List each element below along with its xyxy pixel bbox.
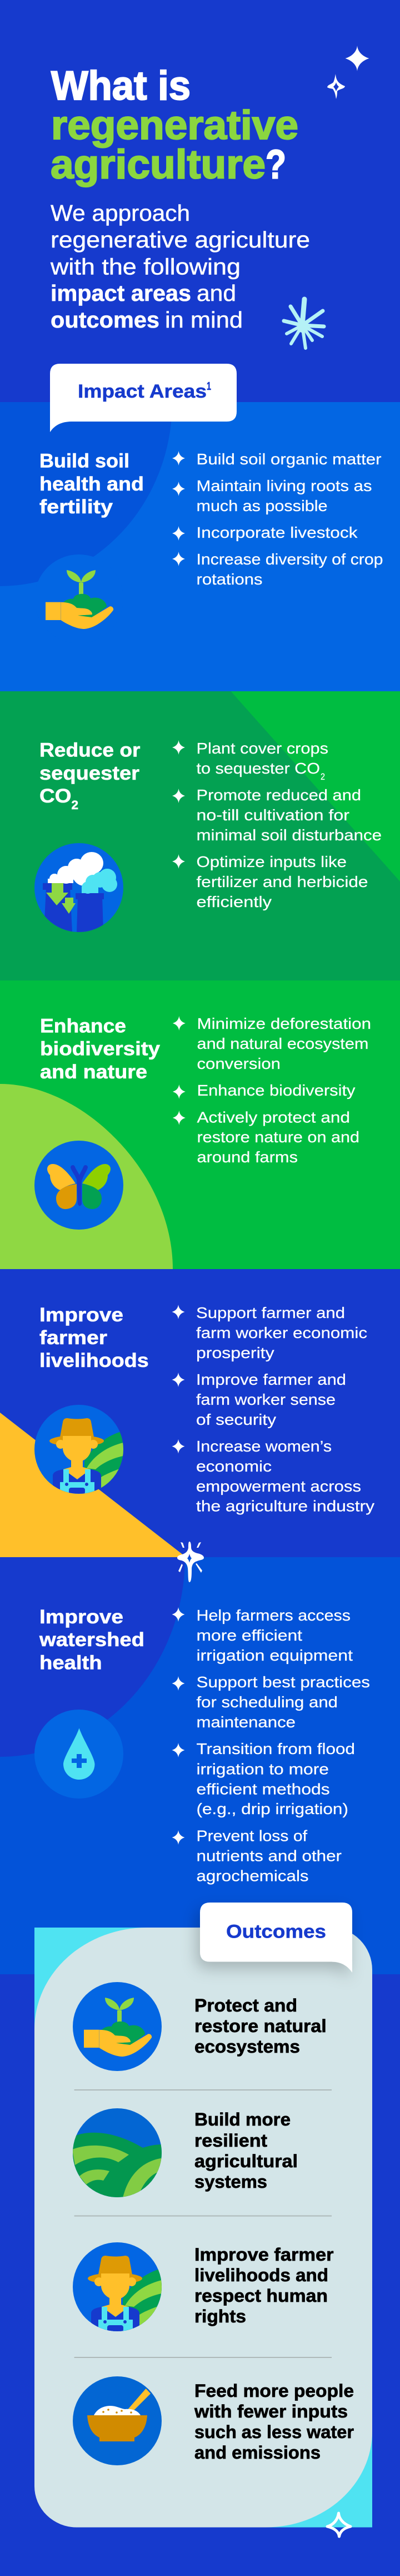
outcome text: livelihoods xyxy=(194,2245,333,2326)
icon: hand holding sprout xyxy=(73,1982,162,2071)
outcome text: feed more people: and emissions xyxy=(194,2443,321,2463)
bullet list: maintenance xyxy=(197,1713,296,1731)
outcome text: ecosystems: restore natural xyxy=(194,2016,327,2036)
outcome text: ecosystems xyxy=(194,1995,327,2057)
icon: rice bowl xyxy=(73,2376,162,2465)
bullet list: Help farmers access xyxy=(197,1607,351,1624)
background shape xyxy=(0,1413,186,1557)
panel: build soil health and fertility xyxy=(0,402,400,691)
outcome text: resilient systems: Build more xyxy=(194,2109,291,2129)
heading: Enhance xyxy=(40,1015,126,1037)
bullet list xyxy=(172,1607,370,1885)
icon: factory with falling emissions xyxy=(34,843,123,932)
icon: hand holding sprout xyxy=(34,554,123,643)
bullet list: Optimize inputs like xyxy=(197,853,347,870)
outcome text: feed more people: such as less water xyxy=(194,2422,354,2442)
bullet list: much as possible xyxy=(197,497,328,514)
bullet list: efficiently xyxy=(197,893,272,910)
intro text: regenerative agriculture xyxy=(51,227,310,252)
heading: livelihoods xyxy=(39,1350,149,1371)
title: What is xyxy=(51,63,191,108)
tab: impact areas xyxy=(50,364,237,432)
bullet list: Minimize deforestation xyxy=(197,1015,371,1032)
heading xyxy=(40,1015,161,1083)
bullet list: Support best practices xyxy=(197,1673,370,1691)
bullet list: Prevent loss of xyxy=(197,1827,307,1845)
intro text xyxy=(50,200,310,333)
tab: outcomes xyxy=(200,1903,352,1973)
outcome text: livelihoods: respect human xyxy=(194,2286,328,2306)
bullet list: efficient methods xyxy=(197,1781,330,1797)
bullet list: Maintain living roots as xyxy=(197,477,372,494)
bullet list: conversion xyxy=(197,1055,281,1072)
title: agriculture xyxy=(51,142,266,187)
outcome text: ecosystems: Protect and xyxy=(194,1995,297,2015)
bullet list: nutrients and other xyxy=(197,1847,342,1865)
heading: farmer xyxy=(39,1327,107,1349)
panel background xyxy=(34,1928,372,2527)
icon: water drop xyxy=(34,1710,123,1799)
title: regenerative xyxy=(51,103,298,148)
icon: farmland xyxy=(72,2108,162,2198)
bullet list: Improve farmer and xyxy=(196,1371,346,1388)
bullet list: farm worker sense xyxy=(196,1391,336,1408)
bullet list xyxy=(172,1304,374,1515)
tab: outcomes: Outcomes xyxy=(226,1921,326,1942)
title: ? xyxy=(266,142,286,187)
bullet list: Increase women’s xyxy=(196,1438,332,1455)
outcome text: feed more people: Feed more people xyxy=(194,2381,354,2401)
intro text: and xyxy=(197,280,236,306)
background shape xyxy=(0,1084,173,1269)
background shape xyxy=(0,402,172,586)
bullet list: Plant cover crops xyxy=(197,740,328,757)
heading xyxy=(39,1606,144,1674)
bullet list: restore nature on and xyxy=(197,1128,359,1146)
bullet list: more efficient xyxy=(197,1627,302,1644)
bullet list: (e.g., drip irrigation) xyxy=(197,1800,348,1817)
intro text: impact areas xyxy=(51,280,191,306)
bullet list: the agriculture industry xyxy=(196,1498,374,1515)
heading xyxy=(39,740,141,812)
outcome text: resilient systems xyxy=(194,2109,298,2192)
bullet list: of security xyxy=(196,1411,276,1428)
intro text: We approach xyxy=(51,200,190,226)
bullet list: and natural ecosystem xyxy=(197,1035,369,1052)
bullet list: Incorporate livestock xyxy=(197,524,358,541)
bullet list: 2 xyxy=(321,771,325,782)
bullet list: fertilizer and herbicide xyxy=(197,873,368,890)
panel corners xyxy=(34,1928,372,2527)
bullet list: Enhance biodiversity xyxy=(197,1082,356,1099)
icon: outlined sparkle xyxy=(327,2513,351,2537)
bullet list: Increase diversity of crop xyxy=(197,551,383,568)
outcome text: resilient systems: systems xyxy=(194,2172,267,2192)
outcome text: ecosystems: ecosystems xyxy=(194,2037,300,2057)
icon: farmer xyxy=(73,2242,162,2332)
outcome text: livelihoods: rights xyxy=(194,2306,246,2326)
outcome text: livelihoods: Improve farmer xyxy=(194,2245,333,2265)
panel: improve watershed health xyxy=(0,1557,400,1974)
outcome text: resilient systems: resilient xyxy=(194,2131,267,2151)
outcome text: livelihoods: livelihoods and xyxy=(194,2265,328,2285)
heading: Improve xyxy=(39,1606,123,1628)
panel: reduce or sequester CO2 xyxy=(0,691,400,980)
heading: fertility xyxy=(39,496,113,518)
bullet list: Transition from flood xyxy=(197,1740,355,1757)
icon: burst xyxy=(284,299,324,348)
panel: enhance biodiversity and nature xyxy=(0,980,400,1269)
tab: impact areas: Impact Areas xyxy=(78,381,207,402)
icon: large sparkle xyxy=(346,46,369,71)
bullet list: irrigation to more xyxy=(197,1761,329,1777)
bullet list: Actively protect and xyxy=(197,1108,350,1126)
bullet list: to sequester CO xyxy=(197,760,320,777)
intro text: outcomes xyxy=(51,307,159,333)
heading: biodiversity xyxy=(40,1038,161,1060)
heading: Improve xyxy=(39,1304,123,1326)
panel: outcomes xyxy=(34,1903,372,2537)
bullet list: minimal soil disturbance xyxy=(197,826,382,844)
intro text: in mind xyxy=(165,307,243,333)
panel: improve farmer livelihoods xyxy=(0,1269,400,1557)
bullet list: around farms xyxy=(197,1148,298,1166)
icon: butterfly xyxy=(34,1141,123,1230)
heading: 2 xyxy=(71,798,78,812)
bullet list: farm worker economic xyxy=(196,1324,367,1341)
heading: watershed xyxy=(39,1629,144,1651)
bullet list: no-till cultivation for xyxy=(197,806,349,824)
header xyxy=(50,46,369,348)
bullet list: irrigation equipment xyxy=(197,1647,353,1664)
icon: sparkle between panels xyxy=(177,1542,204,1582)
icon: outlined sparkle xyxy=(327,74,345,99)
heading: health and xyxy=(39,473,144,495)
bullet list: Support farmer and xyxy=(196,1304,345,1321)
bullet list: agrochemicals xyxy=(197,1867,309,1885)
heading xyxy=(39,1304,149,1371)
bullet list: Promote reduced and xyxy=(197,786,361,804)
bullet list xyxy=(172,450,383,588)
bullet list: rotations xyxy=(197,571,262,588)
outcome text: feed more people: with fewer inputs xyxy=(194,2401,348,2421)
bullet list xyxy=(172,740,382,910)
tab: impact areas: 1 xyxy=(207,380,211,393)
heading: health xyxy=(39,1652,102,1674)
heading: Build soil xyxy=(39,450,129,472)
bullet list: economic xyxy=(196,1458,272,1475)
heading: and nature xyxy=(40,1061,147,1083)
intro text: with the following xyxy=(50,254,241,279)
outcome text: resilient systems: agricultural xyxy=(194,2151,298,2171)
background shape xyxy=(231,691,400,881)
icon: farmer xyxy=(34,1405,123,1494)
title xyxy=(51,63,298,187)
heading: CO xyxy=(39,785,71,807)
bullet list: Build soil organic matter xyxy=(197,450,381,468)
bullet list xyxy=(173,1015,371,1166)
bullet list: empowerment across xyxy=(196,1478,361,1495)
background shape xyxy=(0,1557,185,1757)
outcome text: feed more people xyxy=(194,2381,354,2463)
heading xyxy=(39,450,144,518)
heading: Reduce or xyxy=(39,740,141,761)
bullet list: prosperity xyxy=(196,1344,274,1361)
heading: sequester xyxy=(39,762,139,784)
bullet list: for scheduling and xyxy=(197,1693,338,1711)
